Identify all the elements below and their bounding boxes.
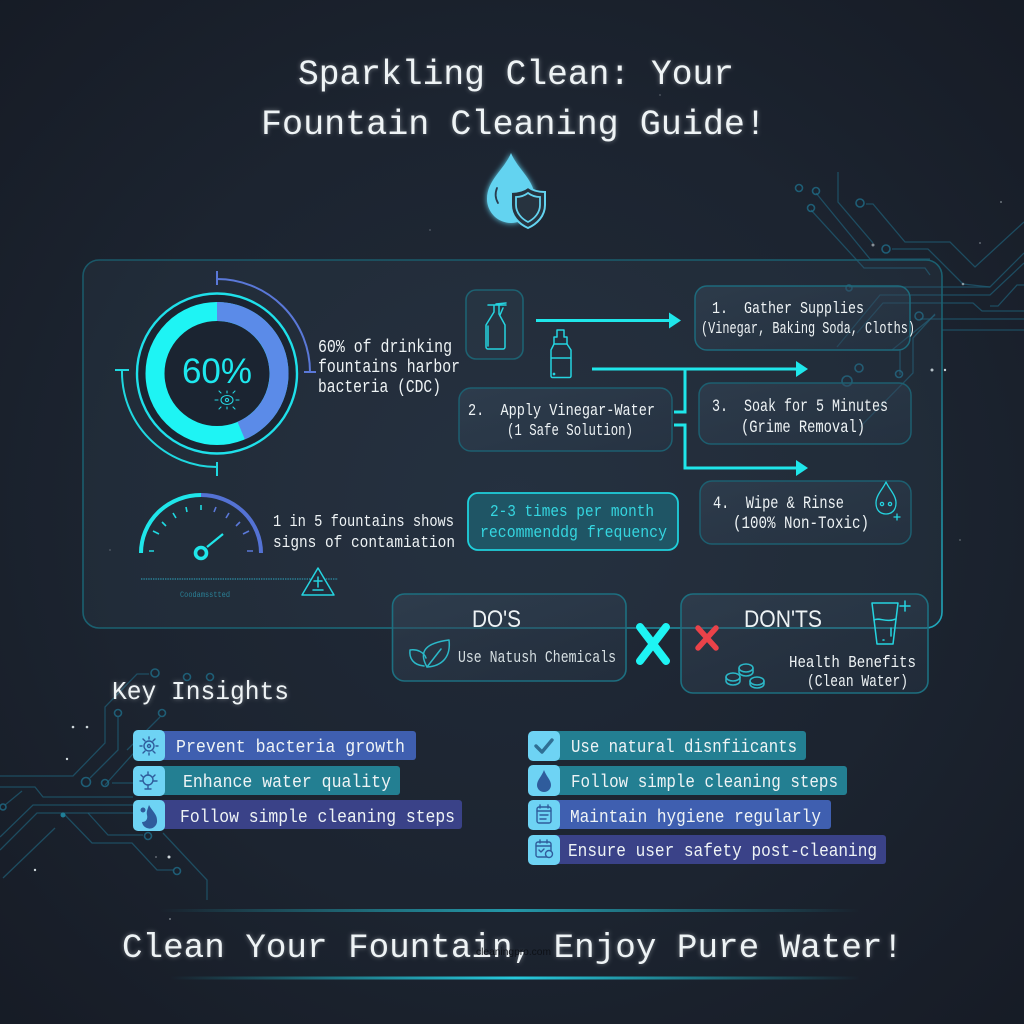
donut chart: 60%: [115, 271, 316, 476]
insight: ensure user safety: [528, 835, 886, 865]
arrow: to step 3: [592, 361, 808, 412]
title: [261, 55, 766, 145]
icon: droplet with plus: [876, 482, 900, 520]
insight: follow simple cleaning steps: [133, 800, 462, 831]
icon: leaves: [410, 640, 449, 667]
icon: water glass: [872, 601, 910, 644]
insight: follow simple cleaning steps (right): [528, 765, 847, 796]
title: Sparkling Clean: Your: [298, 55, 734, 95]
icon: warning triangle: [302, 568, 334, 595]
arrow: to step 4: [674, 425, 808, 476]
frequency callout: 2-3 times per month: [490, 503, 654, 522]
stat text: 60%: [318, 338, 460, 398]
stat text: 60%: 60% of drinking: [318, 338, 452, 358]
step 3 card: 3. Soak for 5 Minutes: [712, 397, 888, 417]
insight: maintain hygiene regularly: [528, 800, 831, 830]
circuit traces: bottom left: [0, 669, 214, 900]
panel: main: [83, 260, 942, 628]
contamination scale: Coodamsstted: [180, 590, 230, 600]
step 4 card: [700, 481, 911, 544]
insight: maintain hygiene regularly: Maintain hygiene regularly: [570, 808, 821, 828]
icon: coins: [726, 664, 764, 688]
arrow: to step 1: [536, 312, 681, 328]
footer line: bottom: [170, 976, 860, 980]
frequency callout: recommenddg frequency: [480, 524, 667, 543]
panel: do's: DO'S: [472, 606, 521, 633]
panel: don'ts: DON'TS: [744, 606, 822, 633]
step 2 card: 2. Apply Vinegar-Water: [468, 402, 655, 421]
sparkle dots: [34, 94, 1002, 920]
step 3 card: [699, 383, 911, 444]
panel: don'ts: [681, 594, 928, 693]
insight: enhance water quality: [133, 766, 400, 796]
icon: water drop with shield: [487, 153, 545, 228]
insight: ensure user safety: Ensure user safety post-cleaning: [568, 842, 877, 862]
stat text: 60%: fountains harbor: [318, 358, 460, 378]
icon: dropper bottle: [551, 330, 571, 378]
title: Fountain Cleaning Guide!: [261, 105, 766, 145]
icon: spray bottle card: [466, 290, 523, 359]
stat text: 1 in 5: signs of contamiation: [273, 534, 455, 553]
panel: don'ts: (Clean Water): [807, 672, 908, 691]
panel: don'ts: Health Benefits: [789, 653, 916, 672]
donut value: 60%: [182, 352, 252, 391]
insight: use natural disinfectants: Use natural disnfiicants: [571, 738, 797, 758]
step 2 card: [459, 388, 672, 451]
panel: do's: [392, 594, 626, 681]
step 1 card: 1. Gather Supplies: [712, 300, 864, 319]
insight: follow simple cleaning steps: Follow simple cleaning steps: [180, 808, 455, 828]
stat text: 1 in 5: 1 in 5 fountains shows: [273, 513, 454, 532]
step 3 card: (Grime Removal): [741, 418, 865, 438]
heading: key insights: Key Insights: [112, 677, 289, 707]
footer line: top: [160, 909, 860, 912]
insight: use natural disinfectants: [528, 731, 806, 761]
big cyan x: [640, 627, 666, 661]
insight: enhance water quality: Enhance water quality: [183, 773, 391, 793]
icon: bacteria: [215, 391, 239, 409]
stat text: 1 in 5: [273, 513, 455, 553]
icon: red x: [698, 628, 716, 648]
watermark: cleaningpro.com: [476, 946, 551, 958]
frequency callout: [468, 493, 678, 550]
step 2 card: (1 Safe Solution): [507, 422, 633, 441]
insight: follow simple cleaning steps (right): Follow simple cleaning steps: [571, 773, 838, 793]
panel: do's: Use Natush Chemicals: [458, 648, 616, 667]
footer tagline: Clean Your Fountain, Enjoy Pure Water!: [122, 930, 903, 968]
step 4 card: 4. Wipe & Rinse: [713, 494, 844, 514]
insight: prevent bacteria growth: Prevent bacteria growth: [176, 738, 405, 758]
insight: prevent bacteria growth: [133, 730, 416, 761]
circuit traces: top right: [796, 172, 1024, 427]
stat text: 60%: bacteria (CDC): [318, 378, 441, 398]
step 1 card: (Vinegar, Baking Soda, Cloths): [701, 320, 915, 339]
gauge: [141, 495, 261, 558]
step 4 card: (100% Non-Toxic): [733, 514, 869, 534]
step 1 card: [695, 286, 915, 350]
